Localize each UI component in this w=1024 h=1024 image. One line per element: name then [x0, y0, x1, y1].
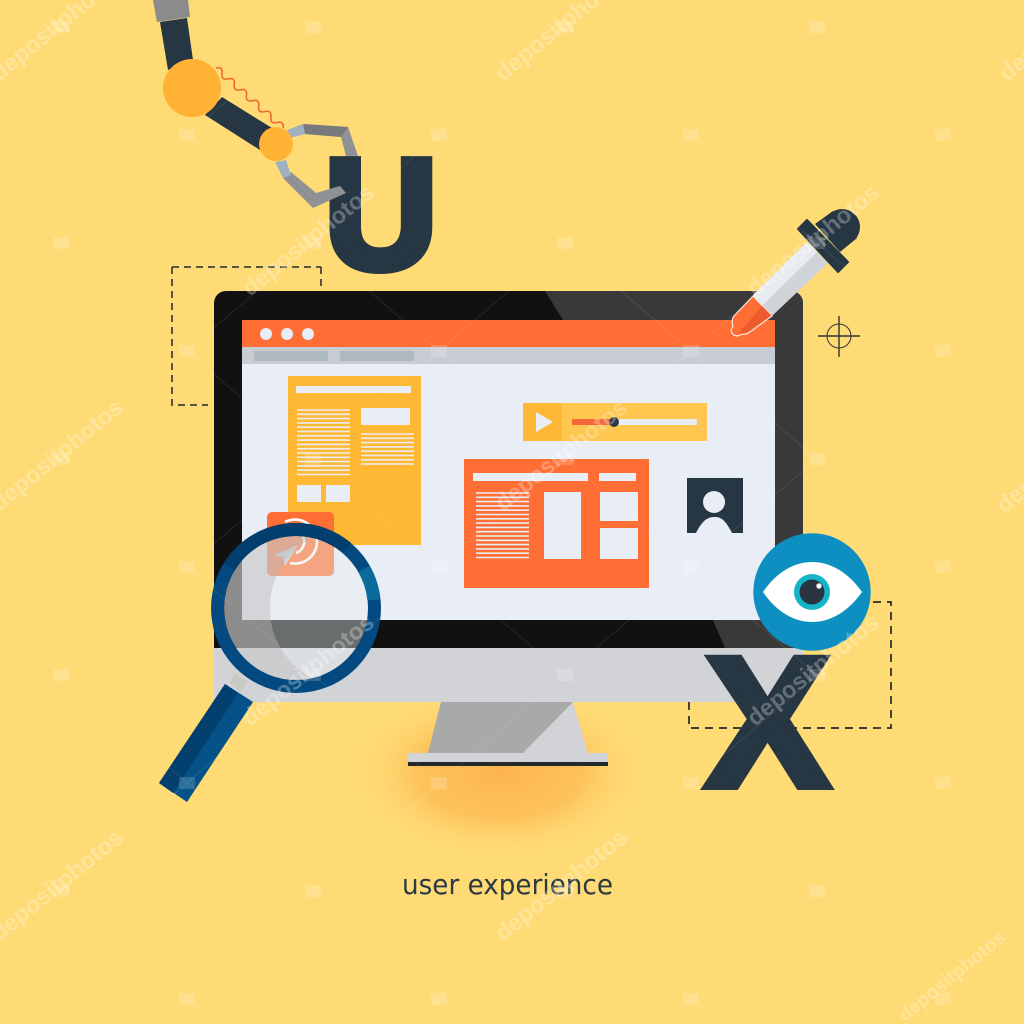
watermark text: depositphotos [237, 609, 379, 731]
spring [216, 68, 283, 128]
target icon tile [267, 512, 334, 576]
caption: user experience [402, 868, 613, 901]
watermark text: depositphotos [490, 394, 632, 516]
dropper flange [798, 220, 848, 272]
watermark text: depositphotos [237, 179, 379, 301]
dropper [731, 209, 860, 336]
watermark text: depositphotos [742, 179, 884, 301]
claw [275, 124, 358, 208]
screen [242, 320, 775, 620]
letter U: U [325, 128, 437, 302]
glow under monitor stand [350, 686, 650, 858]
crosshair [818, 316, 860, 357]
monitor chin [214, 640, 803, 702]
arm fore segment [205, 97, 272, 150]
video player bar [523, 403, 707, 441]
watermark text: depositphotos [742, 609, 884, 731]
letter X: X [706, 620, 829, 826]
monitor [214, 291, 803, 766]
lens [224, 536, 368, 680]
arm joints [163, 59, 293, 161]
dashed frame: top left [172, 267, 321, 405]
browser tab strip [242, 347, 775, 364]
dashed frame: bottom right [689, 602, 891, 728]
magnifier ring [218, 529, 374, 686]
dropper bulb [815, 209, 860, 252]
browser title bar [242, 320, 775, 347]
yellow page layout [288, 376, 421, 545]
monitor bezel [214, 291, 803, 648]
dropper tube [753, 242, 828, 316]
profile avatar [687, 478, 743, 533]
watermark text: depositphotos [895, 927, 1010, 1024]
watermark text: depositphotos [490, 824, 632, 946]
orange page layout [464, 459, 649, 588]
arm upper segment [153, 0, 193, 70]
eye badge [753, 533, 871, 651]
monitor stand [408, 702, 608, 766]
robotic arm [153, 0, 358, 208]
magnifying glass [159, 529, 374, 802]
magnifier handle [159, 684, 253, 802]
magnifier connector [230, 673, 248, 692]
dropper tip [731, 296, 772, 336]
